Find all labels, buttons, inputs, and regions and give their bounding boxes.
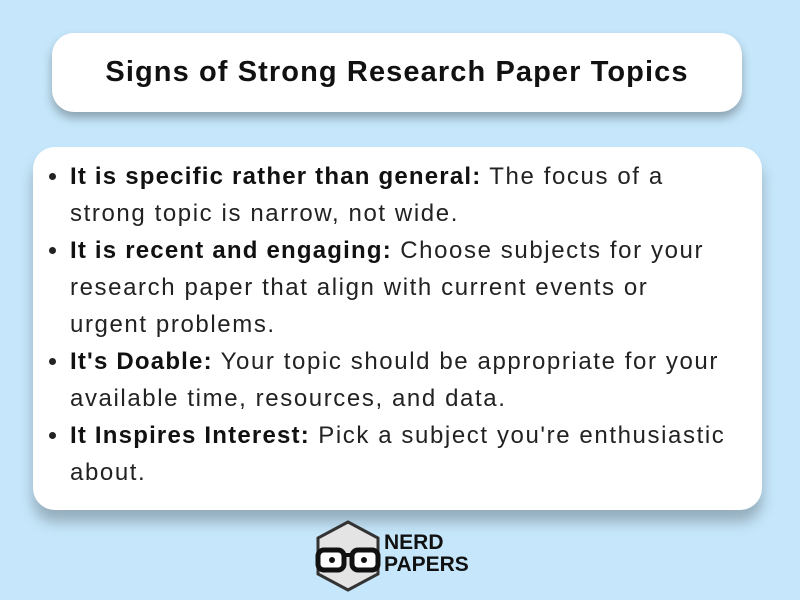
item 2: research paper that align with current events or (70, 274, 648, 301)
item 1: It is specific rather than general: The focus of a (70, 163, 664, 190)
title: Signs of Strong Research Paper Topics (105, 56, 689, 88)
item 2: It is recent and engaging: Choose subjects for your (70, 237, 704, 264)
logo text: PAPERS (384, 553, 469, 576)
item 2: urgent problems. (70, 311, 276, 338)
item 3: It's Doable: Your topic should be appropriate for your (70, 348, 719, 375)
item 3 (49, 348, 719, 412)
icon: nerd hexagon (316, 520, 380, 592)
item 1 (49, 163, 664, 227)
title (52, 33, 742, 112)
item 1: strong topic is narrow, not wide. (70, 200, 459, 227)
item 3: available time, resources, and data. (70, 385, 506, 412)
logo text (384, 531, 469, 576)
item 4: It Inspires Interest: Pick a subject you're enthusiastic (70, 422, 725, 449)
panel: list (33, 147, 762, 510)
item 2 (49, 237, 704, 338)
item 4: about. (70, 459, 146, 486)
logo text: NERD (384, 531, 444, 554)
item 4 (49, 422, 725, 486)
logo (316, 520, 469, 592)
